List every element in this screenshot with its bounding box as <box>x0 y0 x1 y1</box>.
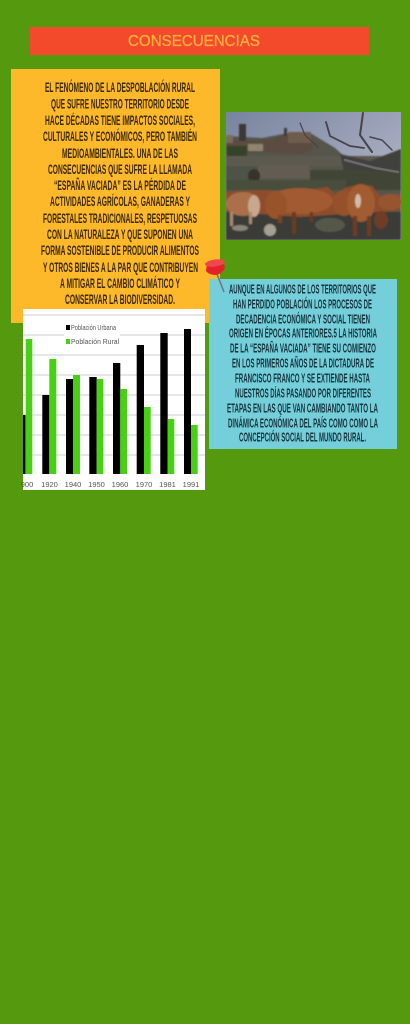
text block: rural depopulation: MEDIOAMBIENTALES. UNA DE LAS <box>62 145 178 161</box>
panel: yellow intro text: FORMA SOSTENIBLE DE PRODUCIR ALIMENTOS <box>41 242 199 258</box>
text block: rural depopulation: ACTIVIDADES AGRÍCOLAS, GANADERAS Y <box>50 193 190 209</box>
icon: red push pin <box>205 258 225 292</box>
title banner: CONSECUENCIAS <box>128 33 260 50</box>
bare branches <box>300 113 398 172</box>
panel: yellow intro text: FORESTALES TRADICIONALES, RESPETUOSAS <box>43 210 197 226</box>
panel: yellow intro text: Y OTROS BIENES A LA PAR QUE CONTRIBUYEN <box>43 259 198 275</box>
chart x axis labels: 900 <box>21 480 33 489</box>
bar chart: urban vs rural population <box>21 309 205 490</box>
text block: rural depopulation: A MITIGAR EL CAMBIO CLIMÁTICO Y <box>60 275 180 291</box>
panel: blue history text <box>209 279 397 449</box>
text block: rural depopulation: CONSERVAR LA BIODIVERSIDAD. <box>65 291 175 307</box>
chart legend: Población Urbana <box>71 323 117 332</box>
urban bars <box>23 329 191 474</box>
chart x axis labels: 1940 <box>65 480 81 489</box>
panel: yellow intro text <box>11 69 220 323</box>
title banner <box>30 27 369 55</box>
terraces <box>349 155 382 162</box>
panel: yellow intro text: CONSECUENCIAS QUE SUFRE LA LLAMADA <box>48 161 192 177</box>
chart legend <box>64 322 120 350</box>
panel: yellow intro text: CON LA NATURALEZA Y QUE SUPONEN UNA <box>47 226 193 242</box>
rural bars <box>26 339 198 474</box>
chart x axis labels: 1920 <box>41 480 58 489</box>
chart legend: Población Rural <box>71 337 119 346</box>
panel: yellow intro text: HACE DÉCADAS TIENE IMPACTOS SOCIALES, <box>45 112 195 128</box>
panel: yellow intro text: QUE SUFRE NUESTRO TERRITORIO DESDE <box>51 96 189 112</box>
hillside <box>226 133 401 213</box>
foreground <box>226 212 401 240</box>
text block: origins of "España vaciada" <box>227 282 378 444</box>
text block: rural depopulation <box>41 78 199 307</box>
panel: yellow intro text: CULTURALES Y ECONÓMICOS, PERO TAMBIÉN <box>43 127 197 144</box>
chart x axis labels: 1991 <box>183 480 199 489</box>
chart x axis labels: 1981 <box>159 480 176 489</box>
chart x axis labels: 1970 <box>136 480 152 489</box>
cows <box>226 184 401 217</box>
chart x axis labels: 1960 <box>112 480 128 489</box>
text block: rural depopulation: “ESPAÑA VACIADA” ES LA PÉRDIDA DE <box>54 176 186 193</box>
chart x axis labels <box>21 480 199 489</box>
panel: yellow intro text: EL FENÓMENO DE LA DESPOBLACIÓN RURAL <box>45 78 195 95</box>
photo: cattle in front of a ruined village <box>226 112 402 240</box>
chart x axis labels: 1950 <box>88 480 105 489</box>
village walls <box>226 135 312 154</box>
